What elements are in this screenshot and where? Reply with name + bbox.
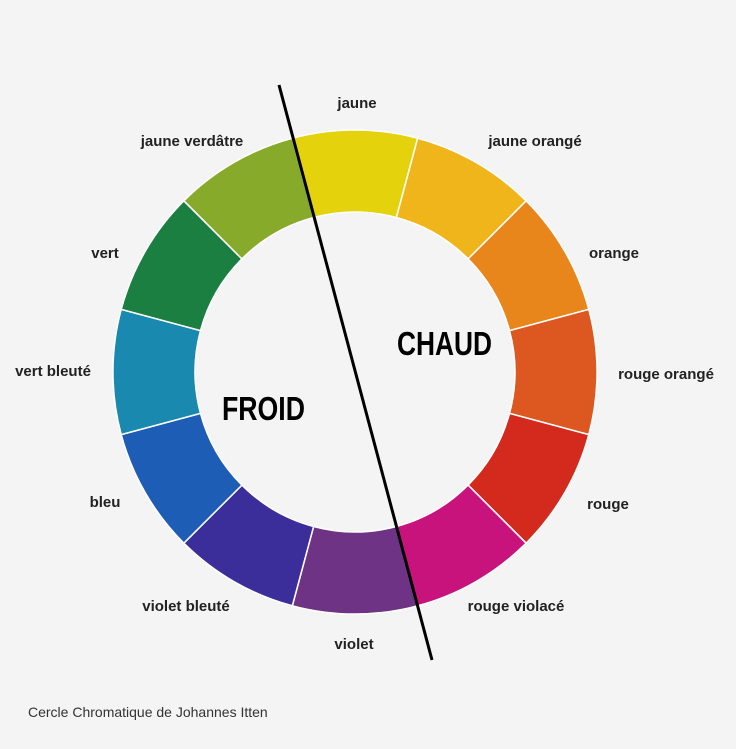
divider line	[279, 85, 432, 660]
color labels: vert	[91, 245, 119, 262]
label: CHAUD: CHAUD	[397, 325, 492, 362]
caption: Cercle Chromatique de Johannes Itten	[28, 704, 268, 720]
color labels: rouge orangé	[618, 366, 714, 383]
color labels: vert bleuté	[15, 363, 91, 380]
color labels: violet	[334, 636, 374, 653]
color labels: rouge violacé	[468, 598, 564, 615]
color labels: bleu	[90, 494, 120, 511]
color labels	[15, 95, 714, 653]
color labels: jaune	[336, 95, 377, 112]
color labels: jaune verdâtre	[140, 133, 243, 150]
color labels: rouge	[587, 496, 629, 513]
color labels: jaune orangé	[487, 133, 582, 150]
color wheel	[113, 130, 597, 614]
color labels: orange	[589, 245, 639, 262]
label: FROID: FROID	[222, 390, 305, 427]
color labels: violet bleuté	[142, 598, 230, 615]
